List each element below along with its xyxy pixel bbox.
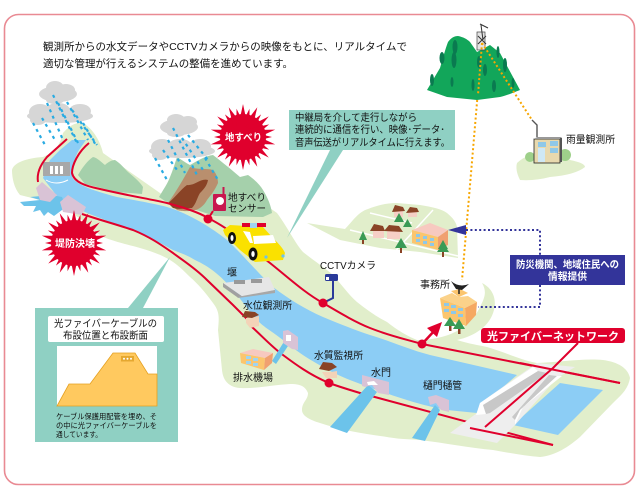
landslide	[168, 167, 218, 211]
houses	[370, 205, 419, 239]
weir label: 堰	[227, 267, 237, 279]
burst: dike breach	[40, 210, 108, 276]
orange radio links	[462, 43, 482, 280]
river below weir	[513, 383, 603, 435]
rain station land	[516, 152, 585, 180]
re-drawn lower line over weir	[470, 428, 553, 445]
water gate label: 水門	[371, 367, 391, 379]
CCTV label: CCTVカメラ	[320, 260, 376, 272]
orange links over mountain	[478, 43, 532, 120]
fiber crossing line	[485, 343, 578, 427]
office label: 事務所	[420, 278, 450, 291]
pale mountain right	[159, 155, 272, 217]
navy dotted link to office	[478, 285, 540, 307]
residential land	[307, 203, 458, 258]
callout: vehicle communication	[287, 110, 455, 238]
fiber network label: 光ファイバーネットワーク	[487, 329, 619, 343]
cable title	[48, 316, 164, 342]
callout: fiber cable section	[35, 257, 178, 442]
rain station	[525, 120, 571, 163]
navy dotted link to building	[466, 230, 540, 255]
rain station label: 雨量観測所	[566, 133, 615, 146]
weir building	[223, 277, 275, 298]
burst: landslide: 地すべり	[225, 131, 262, 144]
cable caption: の中に光ファイバーケーブルを	[56, 420, 157, 430]
cable caption: 通しています。	[56, 429, 102, 439]
navy arrow head	[448, 225, 466, 235]
drainage pump label: 排水機場	[233, 371, 273, 384]
office building	[440, 289, 477, 326]
cross-section chart	[57, 346, 157, 406]
water level station house	[242, 311, 259, 328]
patrol car	[223, 223, 285, 262]
cable caption	[56, 411, 157, 439]
residential roads	[350, 210, 458, 257]
water quality station label: 水質監視所	[314, 349, 363, 362]
re-drawn main line over weir	[520, 363, 620, 383]
intro text: 観測所からの水文データやCCTVカメラからの映像をもとに、リアルタイムで	[43, 40, 407, 53]
callout: vehicle communication: 連続的に通信を行い、映像･データ･	[295, 123, 445, 136]
node on lower line	[324, 378, 334, 388]
sluice gate	[412, 395, 449, 441]
office trees	[444, 317, 465, 334]
disaster info box	[510, 255, 625, 285]
rain	[33, 95, 218, 180]
intro text	[43, 40, 407, 70]
trees	[359, 213, 449, 257]
landslide sensor	[204, 187, 226, 224]
disaster info box: 情報提供	[548, 270, 587, 283]
sluice label: 樋門樋管	[423, 379, 462, 392]
disaster info box: 防災機関、地域住民への	[516, 258, 619, 271]
dike right	[60, 195, 86, 215]
uplink node and arrow	[418, 322, 442, 348]
burst: dike breach: 堤防決壊	[55, 237, 95, 250]
sensor label: 地すべり	[228, 191, 266, 204]
dam	[43, 162, 70, 183]
clouds left	[27, 81, 93, 125]
callout: vehicle communication: 音声伝送がリアルタイムに行えます。	[295, 136, 450, 149]
water gate	[330, 375, 389, 433]
sensor label: センサー	[228, 203, 266, 215]
drainage pump building	[240, 349, 273, 370]
relay tower	[477, 24, 488, 50]
water level station label: 水位観測所	[243, 299, 292, 312]
sensor label	[228, 191, 266, 215]
cable title: 布設位置と布設断面	[63, 329, 148, 342]
water quality station house	[319, 362, 337, 378]
cable caption: ケーブル保護用配管を埋め、そ	[56, 411, 157, 421]
callout: vehicle communication: 中継局を介して走行しながら	[295, 111, 417, 124]
clouds right	[149, 114, 215, 160]
main land	[12, 123, 630, 457]
forest mountain	[427, 36, 520, 100]
dike left	[36, 182, 57, 202]
drainage gate	[272, 330, 298, 364]
dike breach water	[20, 195, 66, 216]
tree by building	[438, 240, 448, 249]
satellite dish	[451, 281, 469, 294]
intro text: 適切な管理が行えるシステムの整備を進めています。	[43, 57, 293, 70]
CCTV camera	[318, 274, 338, 308]
river	[43, 140, 517, 413]
public building	[412, 223, 448, 250]
burst: landslide	[209, 104, 277, 170]
fiber lines	[38, 139, 620, 445]
cable title: 光ファイバーケーブルの	[54, 317, 157, 330]
weir across river	[450, 363, 575, 443]
pale mountain left	[78, 157, 143, 194]
